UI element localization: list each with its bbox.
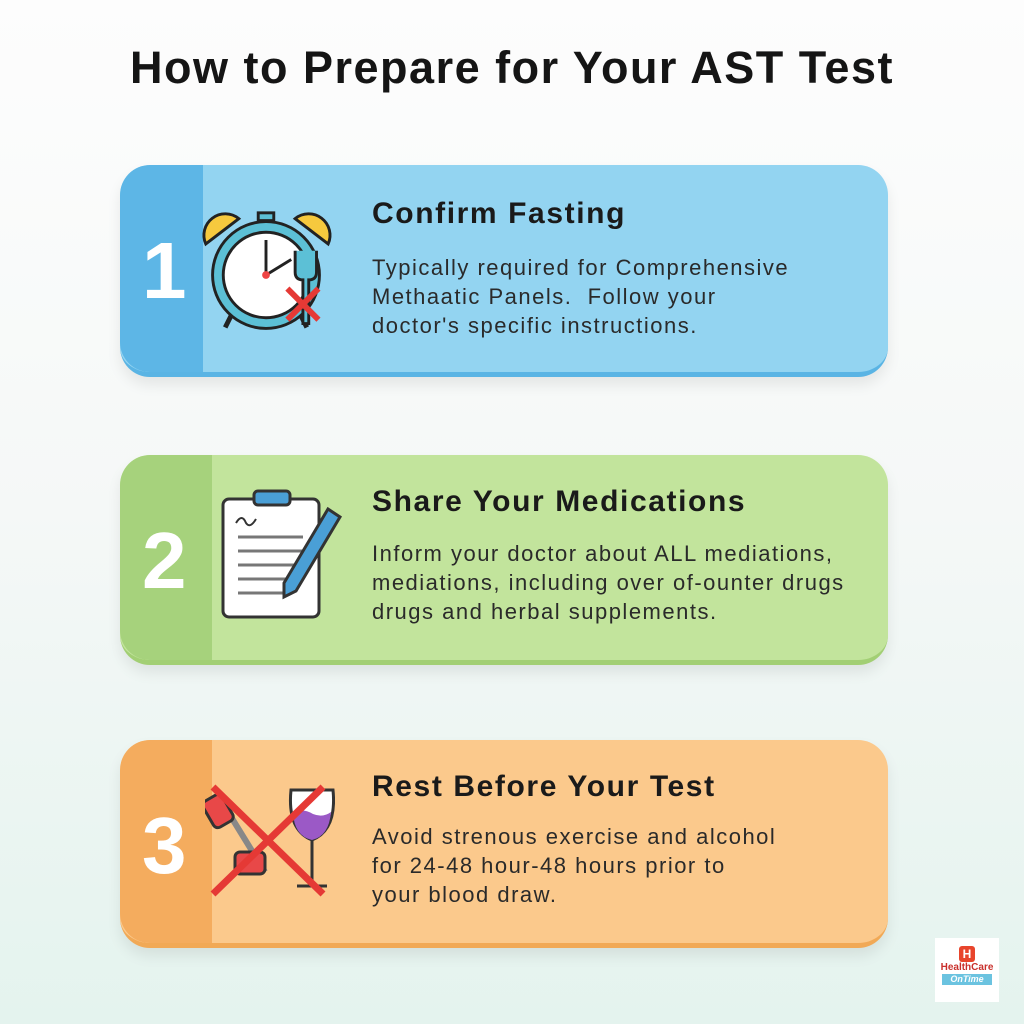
text 1: doctor's specific instructions. — [372, 313, 698, 338]
icon: clipboard with pen — [222, 490, 342, 618]
text 3: Avoid strenous exercise and alcohol — [372, 824, 776, 849]
text 2: drugs and herbal supplements. — [372, 599, 718, 624]
text 3: your blood draw. — [372, 882, 557, 907]
logo: HealthCare OnTime — [935, 938, 999, 1002]
text 3: for 24-48 hour-48 hours prior to — [372, 853, 726, 878]
panel: step 1 fasting — [120, 165, 888, 377]
text 2 — [372, 541, 845, 624]
logo: HealthCare OnTime: HealthCare — [941, 962, 993, 973]
text 1: Methaatic Panels. Follow your — [372, 284, 717, 309]
number 2: 2 — [142, 516, 186, 605]
icon: crossed dumbbell and wine — [205, 784, 335, 896]
heading 3: Rest Before Your Test — [372, 770, 716, 803]
heading 1: Confirm Fasting — [372, 197, 626, 230]
logo: HealthCare OnTime: H — [963, 947, 971, 961]
title: How to Prepare for Your AST Test — [130, 42, 894, 93]
logo: HealthCare OnTime: OnTime — [950, 974, 984, 984]
text 2: Inform your doctor about ALL mediations, — [372, 541, 834, 566]
number 1: 1 — [142, 226, 186, 315]
number strip 3 — [120, 740, 212, 943]
panel: step 3 rest — [120, 740, 888, 948]
panel: step 2 medications — [120, 455, 888, 665]
number 3: 3 — [142, 801, 186, 890]
heading 2: Share Your Medications — [372, 485, 746, 518]
number strip 1 — [120, 165, 203, 372]
icon: alarm clock with fork — [202, 211, 332, 330]
text 3 — [372, 824, 776, 907]
text 2: mediations, including over of-ounter drugs — [372, 570, 845, 595]
text 1 — [372, 255, 789, 338]
number strip 2 — [120, 455, 212, 660]
text 1: Typically required for Comprehensive — [372, 255, 789, 280]
